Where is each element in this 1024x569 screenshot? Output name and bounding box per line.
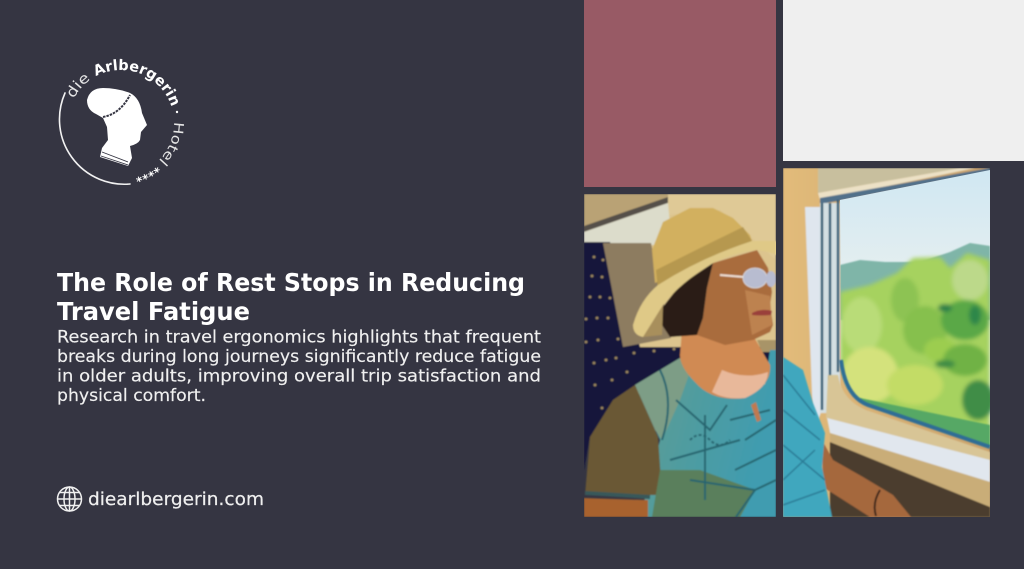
icon: globe bbox=[58, 487, 82, 511]
body text bbox=[57, 328, 542, 405]
logo stars: **** bbox=[136, 167, 160, 182]
logo text: die: die bbox=[68, 75, 90, 97]
logo: die Arlbergerin Hotel bbox=[58, 58, 184, 185]
wall right of face bbox=[757, 340, 776, 352]
seat dots bbox=[585, 256, 675, 409]
panel: light grey colour block bbox=[783, 0, 1024, 161]
sleeve bbox=[585, 385, 662, 495]
body text: Research in travel ergonomics highlights that frequent bbox=[57, 328, 542, 346]
body text: breaks during long journeys significantly reduce fatigue bbox=[57, 347, 541, 366]
mountains bbox=[840, 243, 990, 320]
title: The Role of Rest Stops in Reducing bbox=[57, 268, 525, 297]
shirt bbox=[635, 350, 776, 517]
hat underside bbox=[643, 305, 663, 337]
window gasket bbox=[841, 360, 990, 447]
wall bbox=[638, 209, 776, 386]
grass strip bbox=[860, 398, 990, 450]
blind bbox=[818, 168, 960, 193]
hair bbox=[662, 263, 713, 337]
website url: diearlbergerin.com bbox=[88, 489, 264, 510]
hat band bbox=[656, 227, 752, 290]
logo text: Arlbergerin: Arlbergerin bbox=[95, 58, 178, 106]
window frame bbox=[820, 203, 840, 413]
sill edge bbox=[830, 433, 990, 507]
photo: train window with forest view bbox=[783, 165, 995, 517]
hat crown bbox=[652, 208, 752, 283]
face bbox=[697, 250, 773, 345]
title: Travel Fatigue bbox=[57, 297, 250, 326]
window glass view bbox=[840, 170, 990, 447]
seat headrest cover bbox=[603, 243, 671, 347]
body text: physical comfort. bbox=[57, 386, 206, 405]
navy seat bbox=[584, 242, 776, 470]
sill top bbox=[827, 418, 990, 482]
shirt lower green bbox=[652, 470, 755, 517]
foliage bbox=[840, 253, 994, 450]
logo silhouette bbox=[87, 88, 147, 166]
sill bevel bbox=[826, 375, 990, 462]
blue shirt bbox=[783, 357, 832, 517]
photo: woman in hat on train seat bbox=[584, 194, 795, 517]
title bbox=[57, 268, 525, 326]
shirt shoulder pattern bbox=[635, 358, 690, 440]
logo text: Hotel: Hotel bbox=[160, 123, 184, 166]
logo ring arc bbox=[59, 93, 130, 184]
glasses bbox=[720, 275, 744, 277]
forearm bbox=[584, 498, 648, 517]
logo dot bbox=[176, 111, 178, 113]
neck and chest bbox=[680, 330, 770, 399]
window wall bbox=[783, 168, 990, 517]
wall below window bbox=[830, 442, 990, 517]
panel: rose colour block bbox=[584, 0, 776, 187]
forearm bbox=[822, 440, 911, 517]
shirt pattern bbox=[660, 370, 776, 517]
website row bbox=[58, 487, 264, 511]
body text: in older adults, improving overall trip satisfaction and bbox=[57, 366, 541, 386]
hat brim bbox=[633, 241, 795, 337]
light wall strip bbox=[805, 207, 822, 420]
